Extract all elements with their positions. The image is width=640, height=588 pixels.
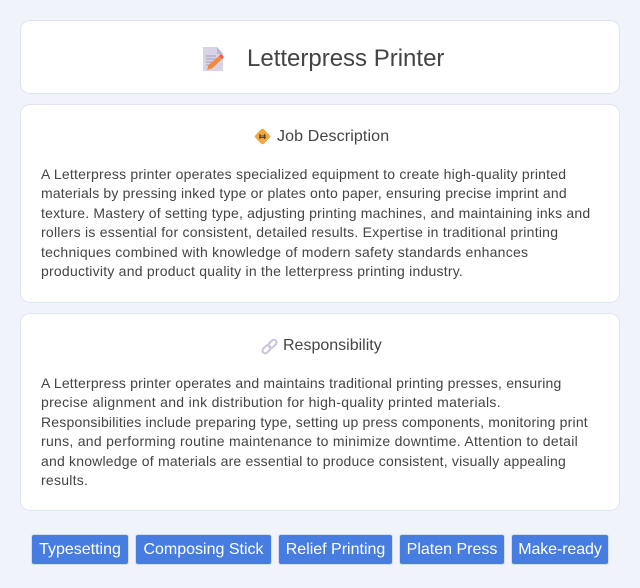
icon: chain link [262, 338, 278, 354]
text block: responsibility: runs, and performing routine maintenance to minimize downtime. Attention to detail [41, 433, 578, 449]
text block: responsibility: and knowledge of materials are essential to produce consistent, visually appealing [41, 453, 566, 469]
text block: responsibility: A Letterpress printer operates and maintains traditional printing presses, ensuring [41, 375, 561, 391]
tag: relief printing: Relief Printing [286, 541, 385, 558]
text block: job description: materials by pressing inked type or plates onto paper, ensuring precise imprint and [41, 185, 567, 201]
icon: orange diamond sign [254, 128, 270, 144]
tag: platen press [399, 534, 505, 565]
heading: job description: Job Description [277, 128, 389, 145]
tag: relief printing [278, 534, 393, 565]
panel: job description [20, 104, 620, 303]
text block: job description: techniques combined with knowledge of modern safety standards enhances [41, 244, 528, 260]
tag: make-ready [511, 534, 609, 565]
title: Letterpress Printer [247, 45, 444, 72]
tags row [31, 534, 609, 565]
text block: responsibility: results. [41, 472, 88, 488]
text block: job description: rollers is essential for consistent, detailed results. Expertise in traditional printing [41, 224, 558, 240]
tag: platen press: Platen Press [407, 541, 497, 558]
text block: job description: A Letterpress printer operates specialized equipment to create high-quality printed [41, 166, 566, 182]
text block: job description [41, 166, 590, 279]
tag: make-ready: Make-ready [518, 541, 602, 558]
tag: composing stick [135, 534, 272, 565]
text block: responsibility: precise alignment and ink distribution for high-quality printed materials. [41, 394, 501, 410]
icon: document with pencil [203, 47, 224, 71]
panel: responsibility [20, 313, 620, 511]
tag: composing stick: Composing Stick [143, 541, 264, 558]
tag: typesetting [31, 534, 129, 565]
text block: job description: productivity and product quality in the letterpress printing industry. [41, 263, 463, 279]
text block: job description: texture. Mastery of setting type, adjusting printing machines, and maintaining inks and [41, 205, 590, 221]
text block: responsibility [41, 375, 588, 488]
tag: typesetting: Typesetting [39, 541, 121, 558]
heading: responsibility: Responsibility [283, 337, 382, 354]
text block: responsibility: Responsibilities include preparing type, setting up press components, monitoring print [41, 414, 588, 430]
panel: header [20, 20, 620, 94]
